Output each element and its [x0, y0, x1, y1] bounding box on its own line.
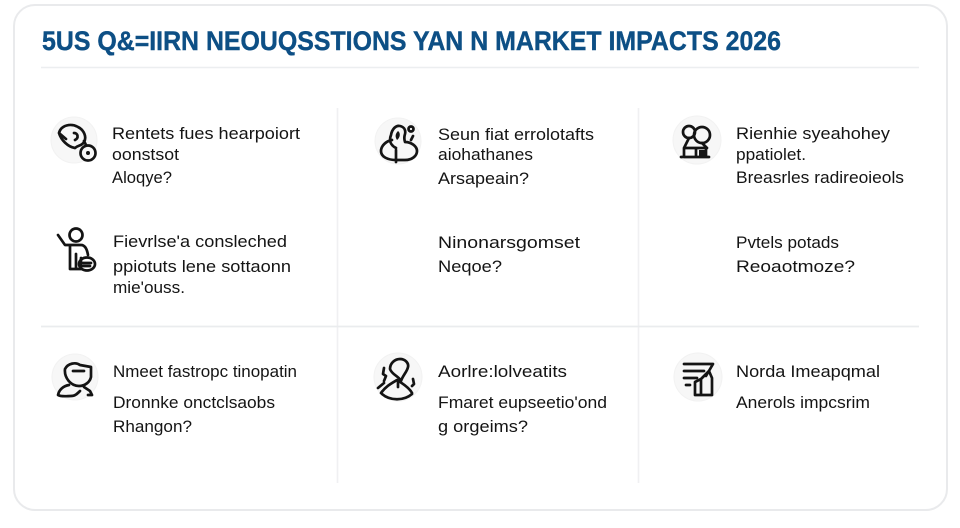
text block: column 3 question 1: Rienhie syeahohey: [736, 125, 891, 143]
icon: figure with leaf: [375, 118, 421, 164]
text block: column 1 question 3: Dronnke onctclsaobs: [113, 394, 275, 412]
text block: column 2 question 1: Arsapeain?: [438, 170, 529, 188]
text block: column 3 question 2: Pvtels potads: [736, 234, 839, 252]
text block: column 1 question 3: [113, 363, 297, 436]
text block: column 2 question 3: Aorlre:lolveatits: [438, 363, 567, 381]
text block: column 1 question 3: Nmeet fastropc tinopatin: [113, 363, 297, 381]
text block: column 3 question 1: Breasrles radireoieols: [736, 169, 904, 187]
text block: column 1 question 3: Rhangon?: [113, 418, 192, 436]
icon: balloon and box: [673, 116, 721, 164]
icon: person with bag: [58, 228, 95, 270]
text block: column 3 question 1: [736, 125, 904, 187]
icon: head with coin: [51, 117, 97, 163]
text block: column 2 question 3: g orgeims?: [438, 418, 528, 436]
text block: column 2 question 1: aiohathanes: [438, 146, 533, 164]
icon: document with lines: [674, 353, 722, 401]
text block: column 3 question 2: Reoaotmoze?: [736, 258, 855, 276]
text block: column 2 question 3: Fmaret eupseetio'ond: [438, 394, 607, 412]
text block: column 1 question 2: mie'ouss.: [113, 279, 185, 297]
text block: column 3 question 1: ppatiolet.: [736, 146, 806, 164]
text block: column 2 question 2: Neqoe?: [438, 258, 502, 276]
text block: column 2 question 2: Ninonarsgomset: [438, 234, 580, 252]
text block: column 3 question 2: [736, 234, 855, 276]
text block: column 1 question 1: [112, 125, 300, 187]
text block: column 1 question 2: ppiotuts lene sottaonn: [113, 258, 291, 276]
icon: person with cap: [52, 354, 98, 400]
text block: column 1 question 2: Fievrlse'a consleched: [113, 233, 287, 251]
text block: column 2 question 1: [438, 126, 594, 188]
text block: column 1 question 1: Rentets fues hearpoiort: [112, 125, 300, 143]
text block: column 3 question 3: [736, 363, 880, 412]
text block: column 1 question 1: oonstsot: [112, 146, 179, 164]
text block: column 1 question 1: Aloqye?: [112, 169, 172, 187]
text block: column 1 question 2: [113, 233, 291, 297]
text block: column 2 question 3: [438, 363, 607, 436]
text block: column 3 question 3: Norda Imeapqmal: [736, 363, 880, 381]
title: 5US Q&=IIRN NEOUQSSTIONS YAN N MARKET IMPACTS 2026: [42, 26, 781, 56]
text block: column 2 question 1: Seun fiat errolotafts: [438, 126, 594, 144]
icon: person in circle: [374, 353, 422, 401]
text block: column 2 question 2: [438, 234, 580, 276]
text block: column 3 question 3: Anerols impcsrim: [736, 394, 870, 412]
